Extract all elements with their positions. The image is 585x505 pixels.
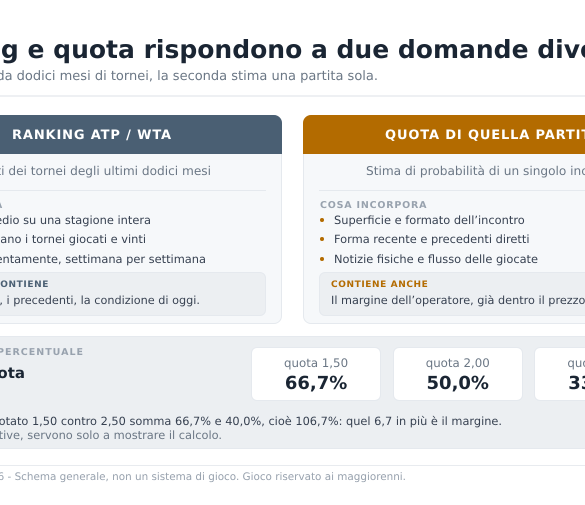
- quota note: [319, 272, 585, 316]
- panel: quota: Notizie fisiche e flusso delle giocate: [334, 252, 538, 266]
- tile: quota 3,00: [534, 347, 585, 401]
- quota label: COSA INCORPORA: [320, 200, 427, 211]
- card background: [303, 115, 585, 324]
- ranking header: [0, 115, 282, 154]
- panel: calcolo: [0, 336, 585, 449]
- tile: quota 2,00: [392, 347, 523, 401]
- tile: quota 1,50: quota 1,50: [284, 356, 348, 370]
- tile: quota 2,00: quota 2,00: [426, 356, 490, 370]
- ranking note: [0, 272, 266, 316]
- bullets: [320, 218, 324, 261]
- panel: ranking: [0, 115, 282, 324]
- footer divider: [0, 465, 585, 466]
- note text: Il margine dell’operatore, già dentro il prezzo: [331, 294, 585, 307]
- tile: quota 2,00: 50,0%: [427, 373, 489, 394]
- panel: quota: Forma recente e precedenti diretti: [334, 232, 530, 246]
- tile: quota 1,50: 66,7%: [285, 373, 347, 394]
- header divider: [0, 95, 585, 97]
- ranking header: RANKING ATP / WTA: [12, 128, 172, 143]
- card background: [0, 115, 282, 324]
- panel: quota: [303, 115, 585, 324]
- quota list: Superficie e formato dell’incontro: [334, 213, 525, 227]
- note label: CONTIENE ANCHE: [331, 280, 428, 290]
- quota header: [303, 115, 585, 154]
- tile: quota 1,50: [251, 347, 381, 401]
